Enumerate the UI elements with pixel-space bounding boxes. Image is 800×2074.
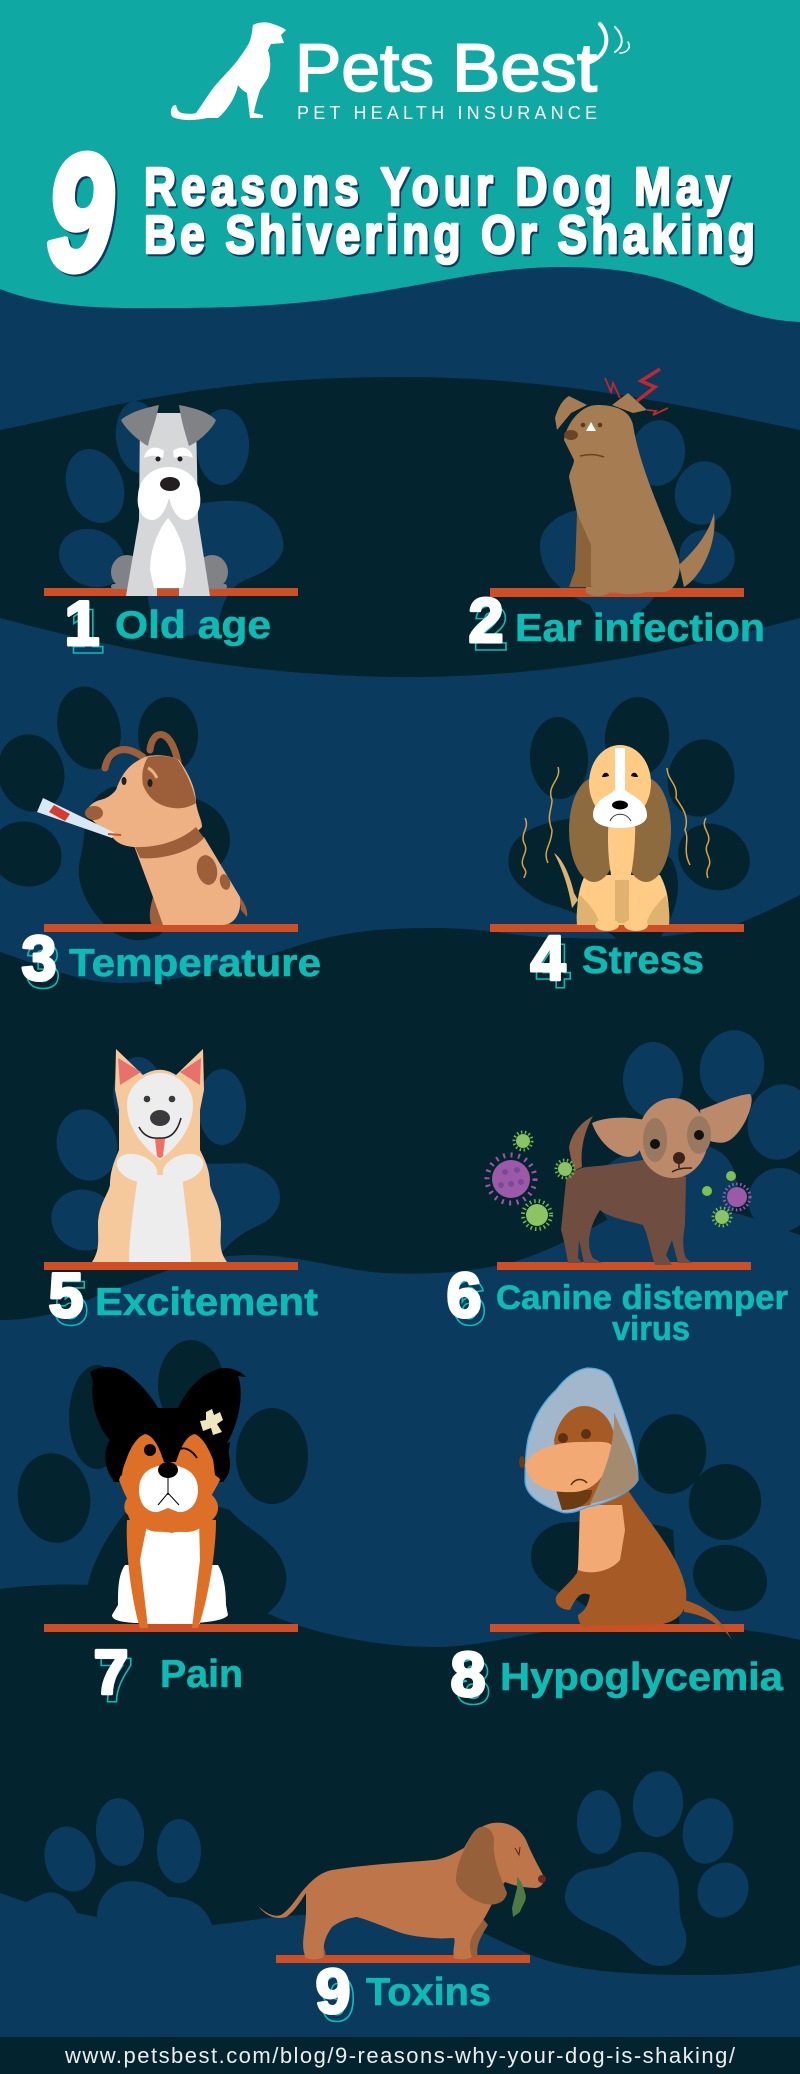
big numeral 9: 9: [47, 121, 113, 304]
panel 9: toxins: [258, 1823, 546, 2035]
label: Ear infection: Ear infection: [515, 607, 765, 650]
number 3: 3: [21, 924, 57, 994]
paw 9 toes: [37, 1796, 201, 1897]
background wave: dark band 1: [0, 377, 800, 677]
shelf 4: [490, 924, 744, 932]
title: [47, 121, 755, 304]
paw 2: [540, 417, 745, 625]
paw 4: [508, 694, 762, 947]
logo wordmark: Pets: [295, 30, 434, 106]
number 8: 8: [455, 1648, 491, 1718]
dog 4: basset hound: [522, 745, 710, 931]
paw 3: [0, 679, 230, 940]
logo: Pets Best: [171, 22, 629, 123]
number 4: 4: [535, 932, 571, 1002]
shelf 5: [44, 1262, 298, 1270]
paw 10: [565, 1769, 757, 1966]
header teal wave: [0, 0, 800, 322]
shelf 6: [497, 1262, 751, 1270]
dog 5: husky: [92, 1049, 227, 1262]
label: Canine distemper virus: [496, 1279, 788, 1348]
number 5: 5: [53, 1269, 89, 1339]
dog 8: dog in cone: [519, 1368, 732, 1640]
label: Stress: Stress: [582, 939, 704, 982]
label: Pain: Pain: [160, 1653, 243, 1696]
label: Excitement: Excitement: [95, 1281, 318, 1324]
shelf 3: [44, 924, 298, 932]
number 6: 6: [451, 1269, 487, 1339]
paw 7: [11, 1340, 308, 1615]
number 1: 1: [69, 597, 105, 667]
label: Temperature: Temperature: [69, 942, 321, 985]
dog 6: chihuahua: [561, 1094, 752, 1265]
panel 6: canine distemper virus: [446, 1094, 788, 1348]
footer URL: www.petsbest.com/blog/9-reasons-why-your-dog-is-shaking/: [64, 2043, 736, 2068]
title line 2: Be Shivering Or Shaking: [144, 205, 755, 265]
number 2: 2: [473, 594, 509, 664]
shelf 9: [276, 1955, 530, 1963]
dog 3: dog with thermometer: [37, 735, 247, 925]
shelf 8: [490, 1624, 744, 1632]
paw 5: [43, 1057, 280, 1262]
icons: viruses: [487, 1132, 750, 1229]
logo tagline: PET HEALTH INSURANCE: [297, 103, 597, 123]
panel 1: old age: [44, 405, 298, 667]
background wave: dark band 2: [0, 895, 800, 1320]
icon: dog silhouette: [171, 22, 286, 120]
label: Toxins: Toxins: [366, 1971, 491, 2014]
paw 8: [531, 1408, 778, 1630]
dog 2: brown dog: [555, 369, 715, 596]
number 7: 7: [98, 1646, 134, 1716]
paw 6: [589, 1024, 800, 1232]
background wave: dark band 3: [0, 1585, 800, 1975]
shelf 7: [44, 1624, 298, 1632]
panel 3: temperature: [21, 735, 321, 1002]
label: Canine distemper virus: Canine distemper: [496, 1279, 788, 1317]
number 9: 9: [315, 1957, 351, 2027]
number 5: 5: [48, 1261, 84, 1331]
label: Hypoglycemia: Hypoglycemia: [500, 1656, 783, 1699]
panel 7: pain: [44, 1367, 298, 1716]
number 2: 2: [468, 586, 504, 656]
label: Old age: Old age: [115, 604, 271, 647]
number 7: 7: [93, 1638, 129, 1708]
logo sound waves: [590, 24, 629, 62]
dog 9: dachshund: [258, 1823, 546, 1959]
number 4: 4: [530, 924, 566, 994]
shelf 2: [490, 588, 744, 597]
number 1: 1: [64, 589, 100, 659]
dog 7: papillon: [90, 1367, 246, 1628]
label: Canine distemper virus: virus: [612, 1310, 690, 1348]
title line 1: Reasons Your Dog May: [144, 157, 731, 217]
logo wordmark: Best: [452, 30, 597, 106]
panel 8: hypoglycemia: [450, 1368, 783, 1718]
panel 5: excitement: [44, 1049, 318, 1339]
number 9: 9: [320, 1965, 356, 2035]
panel 2: ear infection: [468, 369, 765, 664]
dog 1: grey schnauzer: [111, 405, 228, 596]
logo wordmark: [295, 30, 597, 106]
number 8: 8: [450, 1640, 486, 1710]
shelf 1: [44, 588, 298, 596]
footer band: [0, 2037, 800, 2074]
panel 4: stress: [490, 745, 744, 1002]
number 3: 3: [25, 932, 61, 1002]
paw 1: [49, 399, 283, 636]
number 6: 6: [446, 1261, 482, 1331]
